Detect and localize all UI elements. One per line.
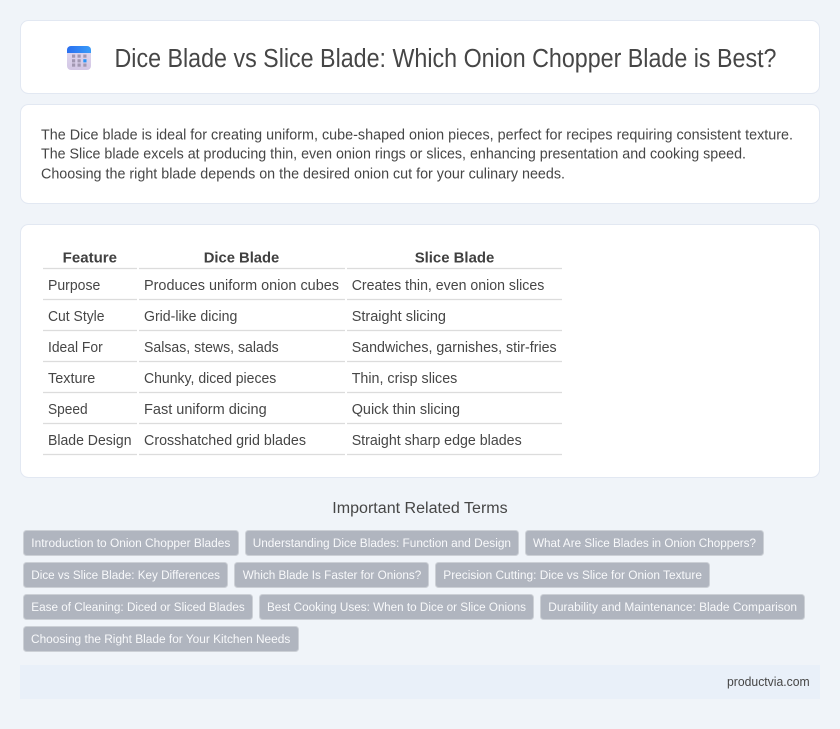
intro paragraph <box>41 128 793 182</box>
tag: Understanding Dice Blades: Function and Design <box>253 536 511 550</box>
row: ideal for: Salsas, stews, salads <box>144 340 279 356</box>
tag: Dice vs Slice Blade: Key Differences <box>31 568 220 582</box>
row: ideal for <box>48 340 557 356</box>
footer source: productvia.com <box>727 675 810 689</box>
row: blade design: Crosshatched grid blades <box>144 433 306 449</box>
row: blade design <box>48 433 522 449</box>
row: ideal for: Sandwiches, garnishes, stir-fries <box>352 340 557 356</box>
row: cut style: Grid-like dicing <box>144 309 237 325</box>
tag <box>540 594 804 620</box>
row: purpose: Creates thin, even onion slices <box>352 278 544 294</box>
intro paragraph: The Dice blade is ideal for creating uniform, cube-shaped onion pieces, perfect for recipes requiring consistent texture. <box>41 128 793 144</box>
row: texture: Texture <box>48 371 95 387</box>
row: blade design: Blade Design <box>48 433 132 449</box>
tag: Introduction to Onion Chopper Blades <box>31 536 230 550</box>
tag: Precision Cutting: Dice vs Slice for Onion Texture <box>443 568 702 582</box>
panel: comparison table <box>20 224 820 478</box>
row: texture <box>48 371 457 387</box>
tag <box>246 530 518 556</box>
tag: Choosing the Right Blade for Your Kitchen Needs <box>31 632 290 646</box>
footer bar <box>20 665 820 699</box>
row: speed: Quick thin slicing <box>352 402 460 418</box>
row: speed: Speed <box>48 402 88 418</box>
tag <box>260 594 534 620</box>
row: texture: Thin, crisp slices <box>352 371 457 387</box>
table header: Feature <box>63 250 117 266</box>
related term tags <box>24 530 804 652</box>
heading: related terms: Important Related Terms <box>332 500 508 517</box>
panel: title card <box>20 20 820 94</box>
tag: Ease of Cleaning: Diced or Sliced Blades <box>31 600 245 614</box>
row: cut style: Cut Style <box>48 309 104 325</box>
tag: Durability and Maintenance: Blade Comparison <box>548 600 797 614</box>
row: cut style: Straight slicing <box>352 309 446 325</box>
intro paragraph: The Slice blade excels at producing thin, even onion rings or slices, enhancing presentation and cooking speed. <box>41 147 746 163</box>
title: Dice Blade vs Slice Blade: Which Onion Chopper Blade is Best? <box>114 45 776 73</box>
row: purpose <box>48 278 544 294</box>
panel: intro text <box>20 104 820 204</box>
tag <box>436 562 710 588</box>
table header: Slice Blade <box>415 250 494 266</box>
tag <box>24 562 228 588</box>
tag: Which Blade Is Faster for Onions? <box>243 568 421 582</box>
tag <box>24 530 238 556</box>
row: speed: Fast uniform dicing <box>144 402 267 418</box>
tag <box>24 594 252 620</box>
tag: Best Cooking Uses: When to Dice or Slice Onions <box>267 600 526 614</box>
row: texture: Chunky, diced pieces <box>144 371 276 387</box>
tag: What Are Slice Blades in Onion Choppers? <box>533 536 756 550</box>
row: blade design: Straight sharp edge blades <box>352 433 522 449</box>
table header: Dice Blade <box>204 250 279 266</box>
tag <box>526 530 764 556</box>
intro paragraph: Choosing the right blade depends on the desired onion cut for your culinary needs. <box>41 166 565 182</box>
table header <box>63 250 494 266</box>
row: ideal for: Ideal For <box>48 340 103 356</box>
row: purpose: Produces uniform onion cubes <box>144 278 339 294</box>
tag <box>234 562 428 588</box>
icon: calendar grid <box>67 46 91 70</box>
row: cut style <box>48 309 446 325</box>
tag <box>24 626 298 652</box>
row: purpose: Purpose <box>48 278 100 294</box>
row: speed <box>48 402 460 418</box>
